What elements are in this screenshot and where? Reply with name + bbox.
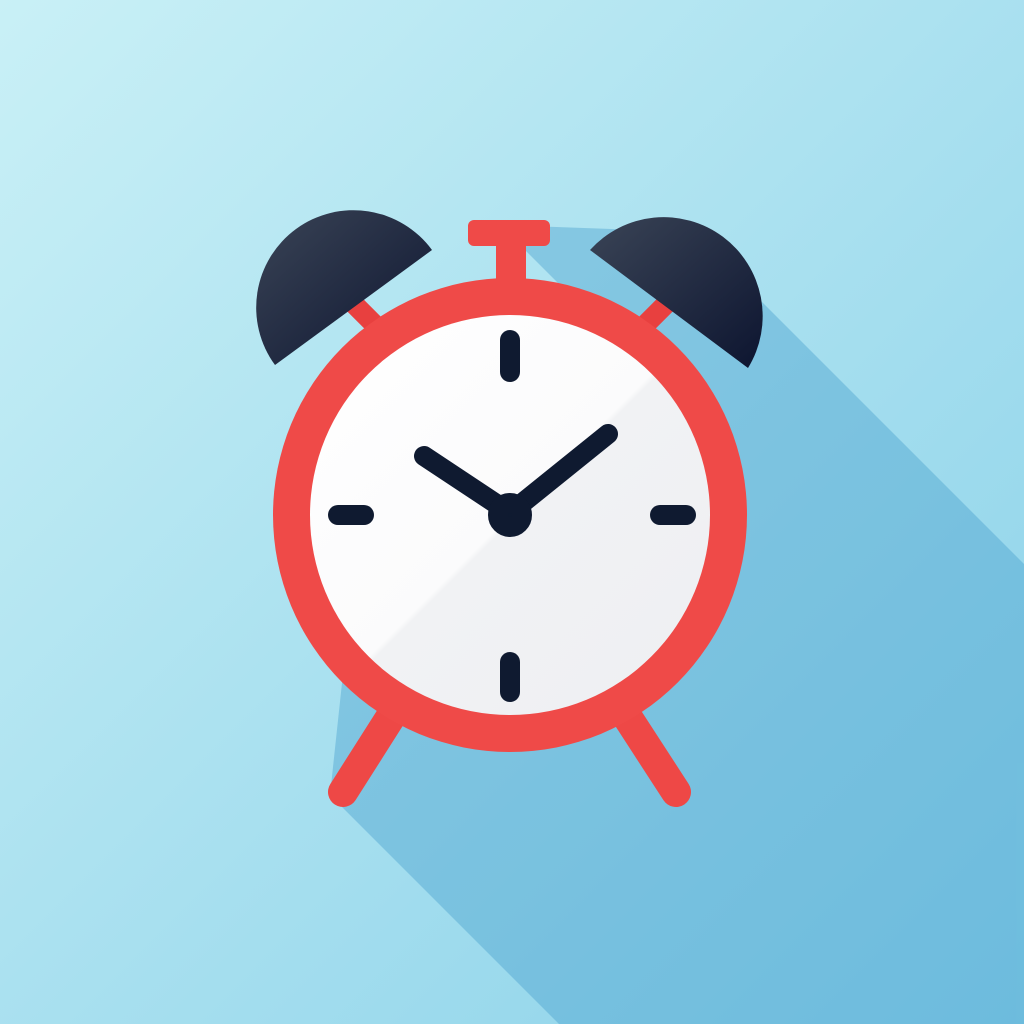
bell connectors	[350, 300, 670, 335]
icon: right bell	[590, 217, 763, 368]
legs	[343, 718, 676, 792]
clock hands	[424, 434, 608, 527]
hour ticks	[338, 340, 686, 692]
top button	[468, 220, 550, 288]
clock ring	[273, 278, 747, 752]
icon: left bell	[256, 210, 432, 365]
long shadow	[330, 225, 1024, 1024]
clock face	[310, 315, 710, 715]
